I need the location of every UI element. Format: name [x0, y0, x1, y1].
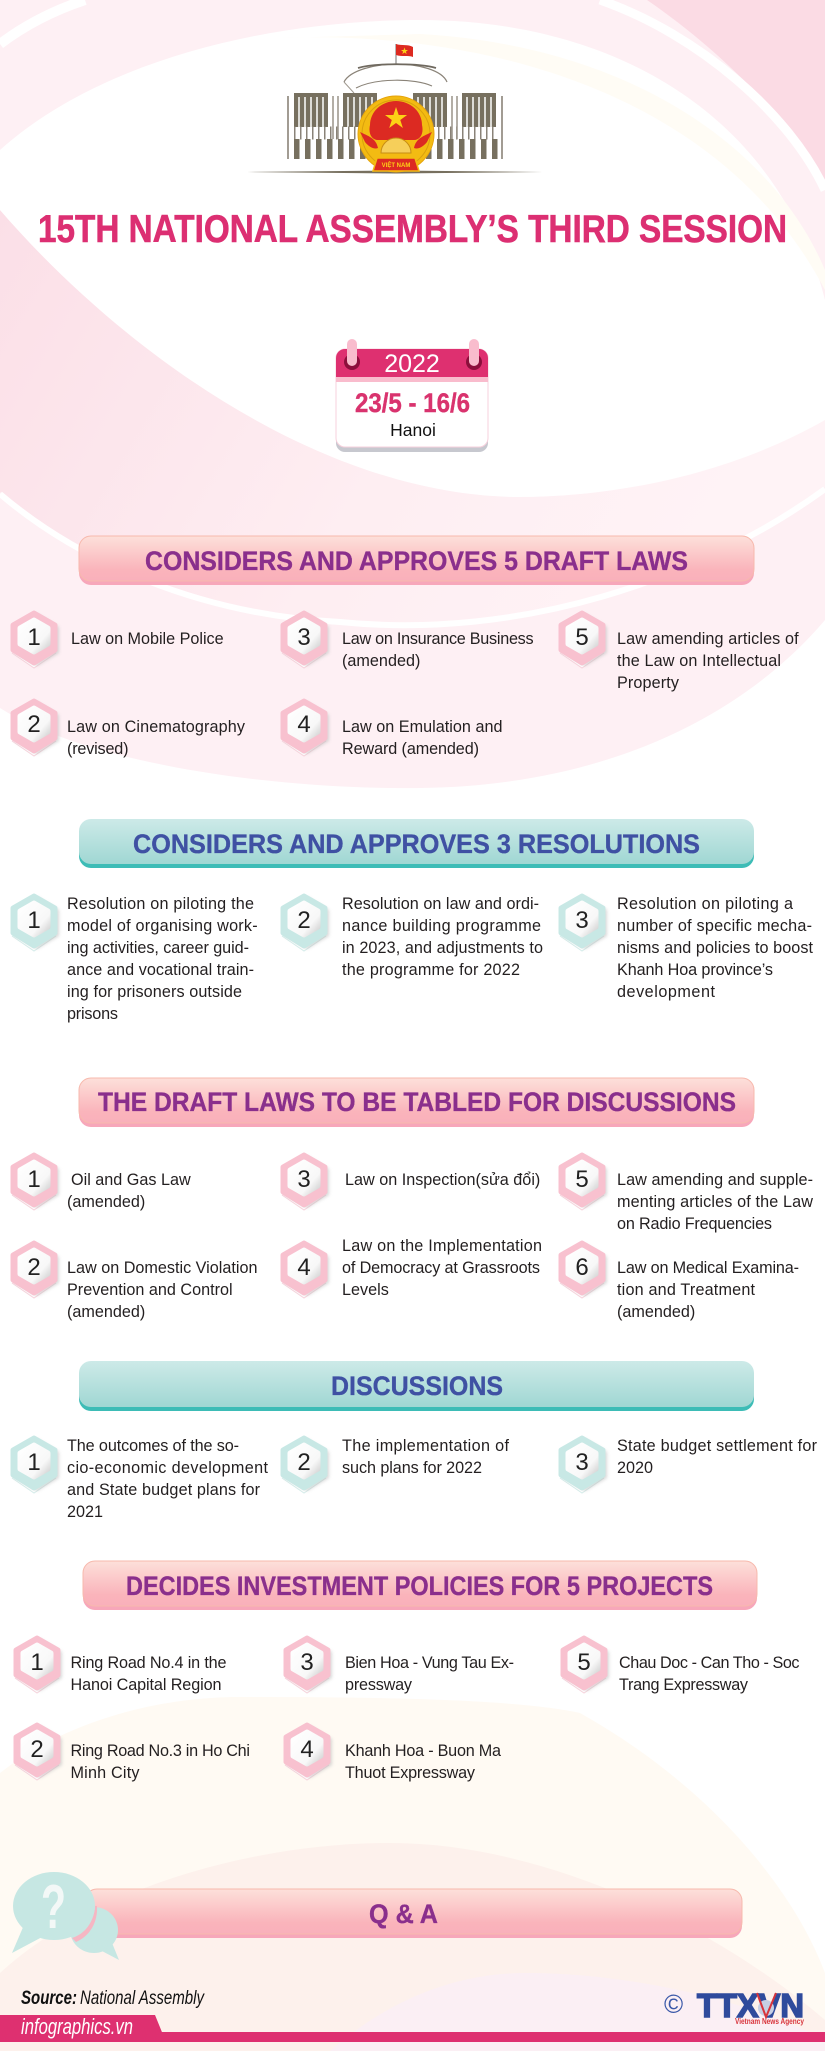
- item 1: [12, 613, 224, 668]
- item 2: 2: [297, 1449, 311, 1476]
- item 1: Law on Mobile Police: [71, 630, 224, 648]
- calendar: 2022, 23/5 - 16/6, Hanoi: Hanoi: [390, 420, 436, 440]
- panel: discussions list: [12, 1437, 818, 1521]
- heading: decides investment policies for 5 projects: [83, 1561, 757, 1610]
- item 5: menting articles of the Law: [617, 1193, 813, 1211]
- item 2: Resolution on law and ordi-: [342, 895, 539, 913]
- item 3: Law on Insurance Business: [342, 630, 534, 648]
- heading: considers and approves 5 draft laws: [79, 536, 754, 585]
- item 2: [12, 1243, 257, 1321]
- icon: national emblem: [358, 96, 434, 172]
- heading: considers and approves 3 resolutions: CONSIDERS AND APPROVES 3 RESOLUTIONS: [133, 829, 700, 859]
- item 3: number of specific mecha-: [617, 917, 812, 935]
- calendar: 2022, 23/5 - 16/6, Hanoi: [336, 339, 488, 452]
- item 1: [12, 1437, 268, 1521]
- item 4: Reward (amended): [342, 740, 479, 758]
- item 5: [562, 1638, 800, 1694]
- item 3: nisms and policies to boost: [617, 939, 814, 957]
- item 4: Thuot Expressway: [345, 1764, 476, 1782]
- item 4: Khanh Hoa - Buon Ma: [345, 1742, 501, 1760]
- item 3: 3: [575, 1449, 589, 1476]
- item 1: Oil and Gas Law: [71, 1171, 191, 1189]
- item 3: Khanh Hoa province’s: [617, 961, 773, 979]
- heading: the draft laws to be tabled for discussions: [79, 1078, 754, 1127]
- item 5: 5: [577, 1649, 591, 1676]
- item 1: Ring Road No.4 in the: [70, 1654, 226, 1672]
- item 3: 2020: [617, 1459, 653, 1477]
- item 1: The outcomes of the so-: [67, 1437, 239, 1455]
- item 1: prisons: [67, 1005, 118, 1023]
- item 2: [15, 1725, 250, 1782]
- item 3: [282, 613, 534, 670]
- item 6: tion and Treatment: [617, 1281, 756, 1299]
- icon: question speech bubbles: [12, 1872, 119, 1960]
- source: Source:: [21, 1988, 77, 2009]
- item 5: Law amending articles of: [617, 630, 799, 648]
- logo: TTXVN Vietnam News Agency: ©: [664, 1989, 683, 2019]
- item 1: ance and vocational train-: [67, 961, 254, 979]
- item 3: [285, 1638, 514, 1694]
- item 4: 4: [297, 711, 311, 738]
- item 2: [12, 701, 246, 758]
- item 2: Law on Cinematography: [67, 718, 246, 736]
- item 3: 3: [297, 1166, 311, 1193]
- item 5: Chau Doc - Can Tho - Soc: [619, 1654, 800, 1672]
- item 5: Law amending and supple-: [617, 1171, 813, 1189]
- heading: Q & A: [85, 1889, 742, 1938]
- item 6: 6: [575, 1254, 589, 1281]
- item 4: 4: [297, 1254, 311, 1281]
- calendar: 2022, 23/5 - 16/6, Hanoi: 23/5 - 16/6: [355, 388, 470, 418]
- item 4: Levels: [342, 1281, 389, 1299]
- item 2: nance building programme: [342, 917, 541, 935]
- item 3: 3: [297, 624, 311, 651]
- item 1: ing for prisoners outside: [67, 983, 242, 1001]
- icon: National Assembly building with national emblem: [247, 44, 543, 174]
- item 5: [560, 1155, 813, 1233]
- item 1: model of organising work-: [67, 917, 258, 935]
- calendar: 2022, 23/5 - 16/6, Hanoi: 2022: [384, 350, 440, 378]
- item 3: [282, 1155, 540, 1210]
- item 3: [560, 895, 814, 1001]
- item 5: 5: [575, 624, 589, 651]
- item 1: [15, 1638, 226, 1694]
- item 2: 2: [297, 907, 311, 934]
- item 3: development: [617, 983, 716, 1001]
- item 1: Resolution on piloting the: [67, 895, 254, 913]
- item 2: in 2023, and adjustments to: [342, 939, 543, 957]
- item 4: [282, 1237, 542, 1299]
- logo: TTXVN Vietnam News Agency: TTXVN: [697, 1987, 804, 2024]
- item 6: Law on Medical Examina-: [617, 1259, 799, 1277]
- item 1: and State budget plans for: [67, 1481, 261, 1499]
- panel: resolutions list: [12, 895, 814, 1023]
- icon: flag: [396, 44, 413, 64]
- item 4: [282, 701, 502, 758]
- item 2: 2: [27, 711, 41, 738]
- item 2: such plans for 2022: [342, 1459, 482, 1477]
- item 1: Hanoi Capital Region: [70, 1676, 222, 1694]
- item 2: (revised): [67, 740, 128, 758]
- item 3: pressway: [345, 1676, 413, 1694]
- item 5: [560, 613, 799, 692]
- heading: discussions: DISCUSSIONS: [331, 1371, 503, 1401]
- item 1: [12, 1155, 191, 1211]
- item 3: State budget settlement for: [617, 1437, 818, 1455]
- item 2: 2: [27, 1254, 41, 1281]
- item 3: Bien Hoa - Vung Tau Ex-: [345, 1654, 514, 1672]
- item 6: (amended): [617, 1303, 695, 1321]
- heading: the draft laws to be tabled for discussions: THE DRAFT LAWS TO BE TABLED FOR DISCUSSIONS: [98, 1087, 736, 1117]
- item 4: Law on the Implementation: [342, 1237, 542, 1255]
- footer band: infographics.vn: infographics.vn: [21, 2014, 133, 2039]
- footer band: infographics.vn: [0, 2014, 825, 2042]
- heading: discussions: [79, 1361, 754, 1411]
- heading: considers and approves 5 draft laws: CONSIDERS AND APPROVES 5 DRAFT LAWS: [145, 546, 688, 576]
- source: [21, 1988, 205, 2009]
- item 1: cio-economic development: [67, 1459, 268, 1477]
- item 3: Law on Inspection(sửa đổi): [345, 1171, 540, 1189]
- item 3: 3: [575, 907, 589, 934]
- item 6: [560, 1243, 799, 1321]
- item 2: Ring Road No.3 in Ho Chi: [70, 1742, 250, 1760]
- item 1: 1: [27, 624, 41, 651]
- item 1: 1: [27, 1449, 41, 1476]
- item 4: Law on Emulation and: [342, 718, 502, 736]
- item 1: ing activities, career guid-: [67, 939, 249, 957]
- heading: considers and approves 3 resolutions: [79, 819, 754, 868]
- item 2: [282, 1437, 510, 1493]
- item 1: 1: [30, 1649, 44, 1676]
- panel: draft laws list: [12, 613, 799, 758]
- icon: national emblem: VIỆT NAM: [382, 161, 410, 169]
- heading: decides investment policies for 5 projects: DECIDES INVESTMENT POLICIES FOR 5 PROJECTS: [126, 1571, 713, 1601]
- item 2: the programme for 2022: [342, 961, 520, 979]
- item 1: 1: [27, 1166, 41, 1193]
- item 2: Law on Domestic Violation: [67, 1259, 257, 1277]
- item 5: the Law on Intellectual: [617, 652, 781, 670]
- source: National Assembly: [80, 1988, 205, 2009]
- item 1: 1: [27, 907, 41, 934]
- item 2: Minh City: [70, 1764, 140, 1782]
- heading: Q & A: Q & A: [369, 1899, 438, 1929]
- item 2: [282, 895, 543, 979]
- item 5: on Radio Frequencies: [617, 1215, 772, 1233]
- icon: question speech bubbles: ?: [41, 1873, 66, 1942]
- item 5: Property: [617, 674, 680, 692]
- item 2: 2: [30, 1736, 44, 1763]
- panel: draft laws to be tabled: [12, 1155, 813, 1321]
- panel: investment projects list: [15, 1638, 800, 1782]
- item 1: [12, 895, 258, 1023]
- item 5: 5: [575, 1166, 589, 1193]
- item 3: Resolution on piloting a: [617, 895, 793, 913]
- item 4: of Democracy at Grassroots: [342, 1259, 540, 1277]
- logo: TTXVN Vietnam News Agency: Vietnam News Agency: [735, 2017, 804, 2026]
- item 4: [285, 1725, 501, 1782]
- item 5: Trang Expressway: [619, 1676, 749, 1694]
- item 2: Prevention and Control: [67, 1281, 233, 1299]
- item 1: (amended): [67, 1193, 145, 1211]
- item 3: 3: [300, 1649, 314, 1676]
- item 2: The implementation of: [342, 1437, 510, 1455]
- item 3: (amended): [342, 652, 420, 670]
- item 3: [560, 1437, 818, 1493]
- item 2: (amended): [67, 1303, 145, 1321]
- item 1: 2021: [67, 1503, 103, 1521]
- item 4: 4: [300, 1736, 314, 1763]
